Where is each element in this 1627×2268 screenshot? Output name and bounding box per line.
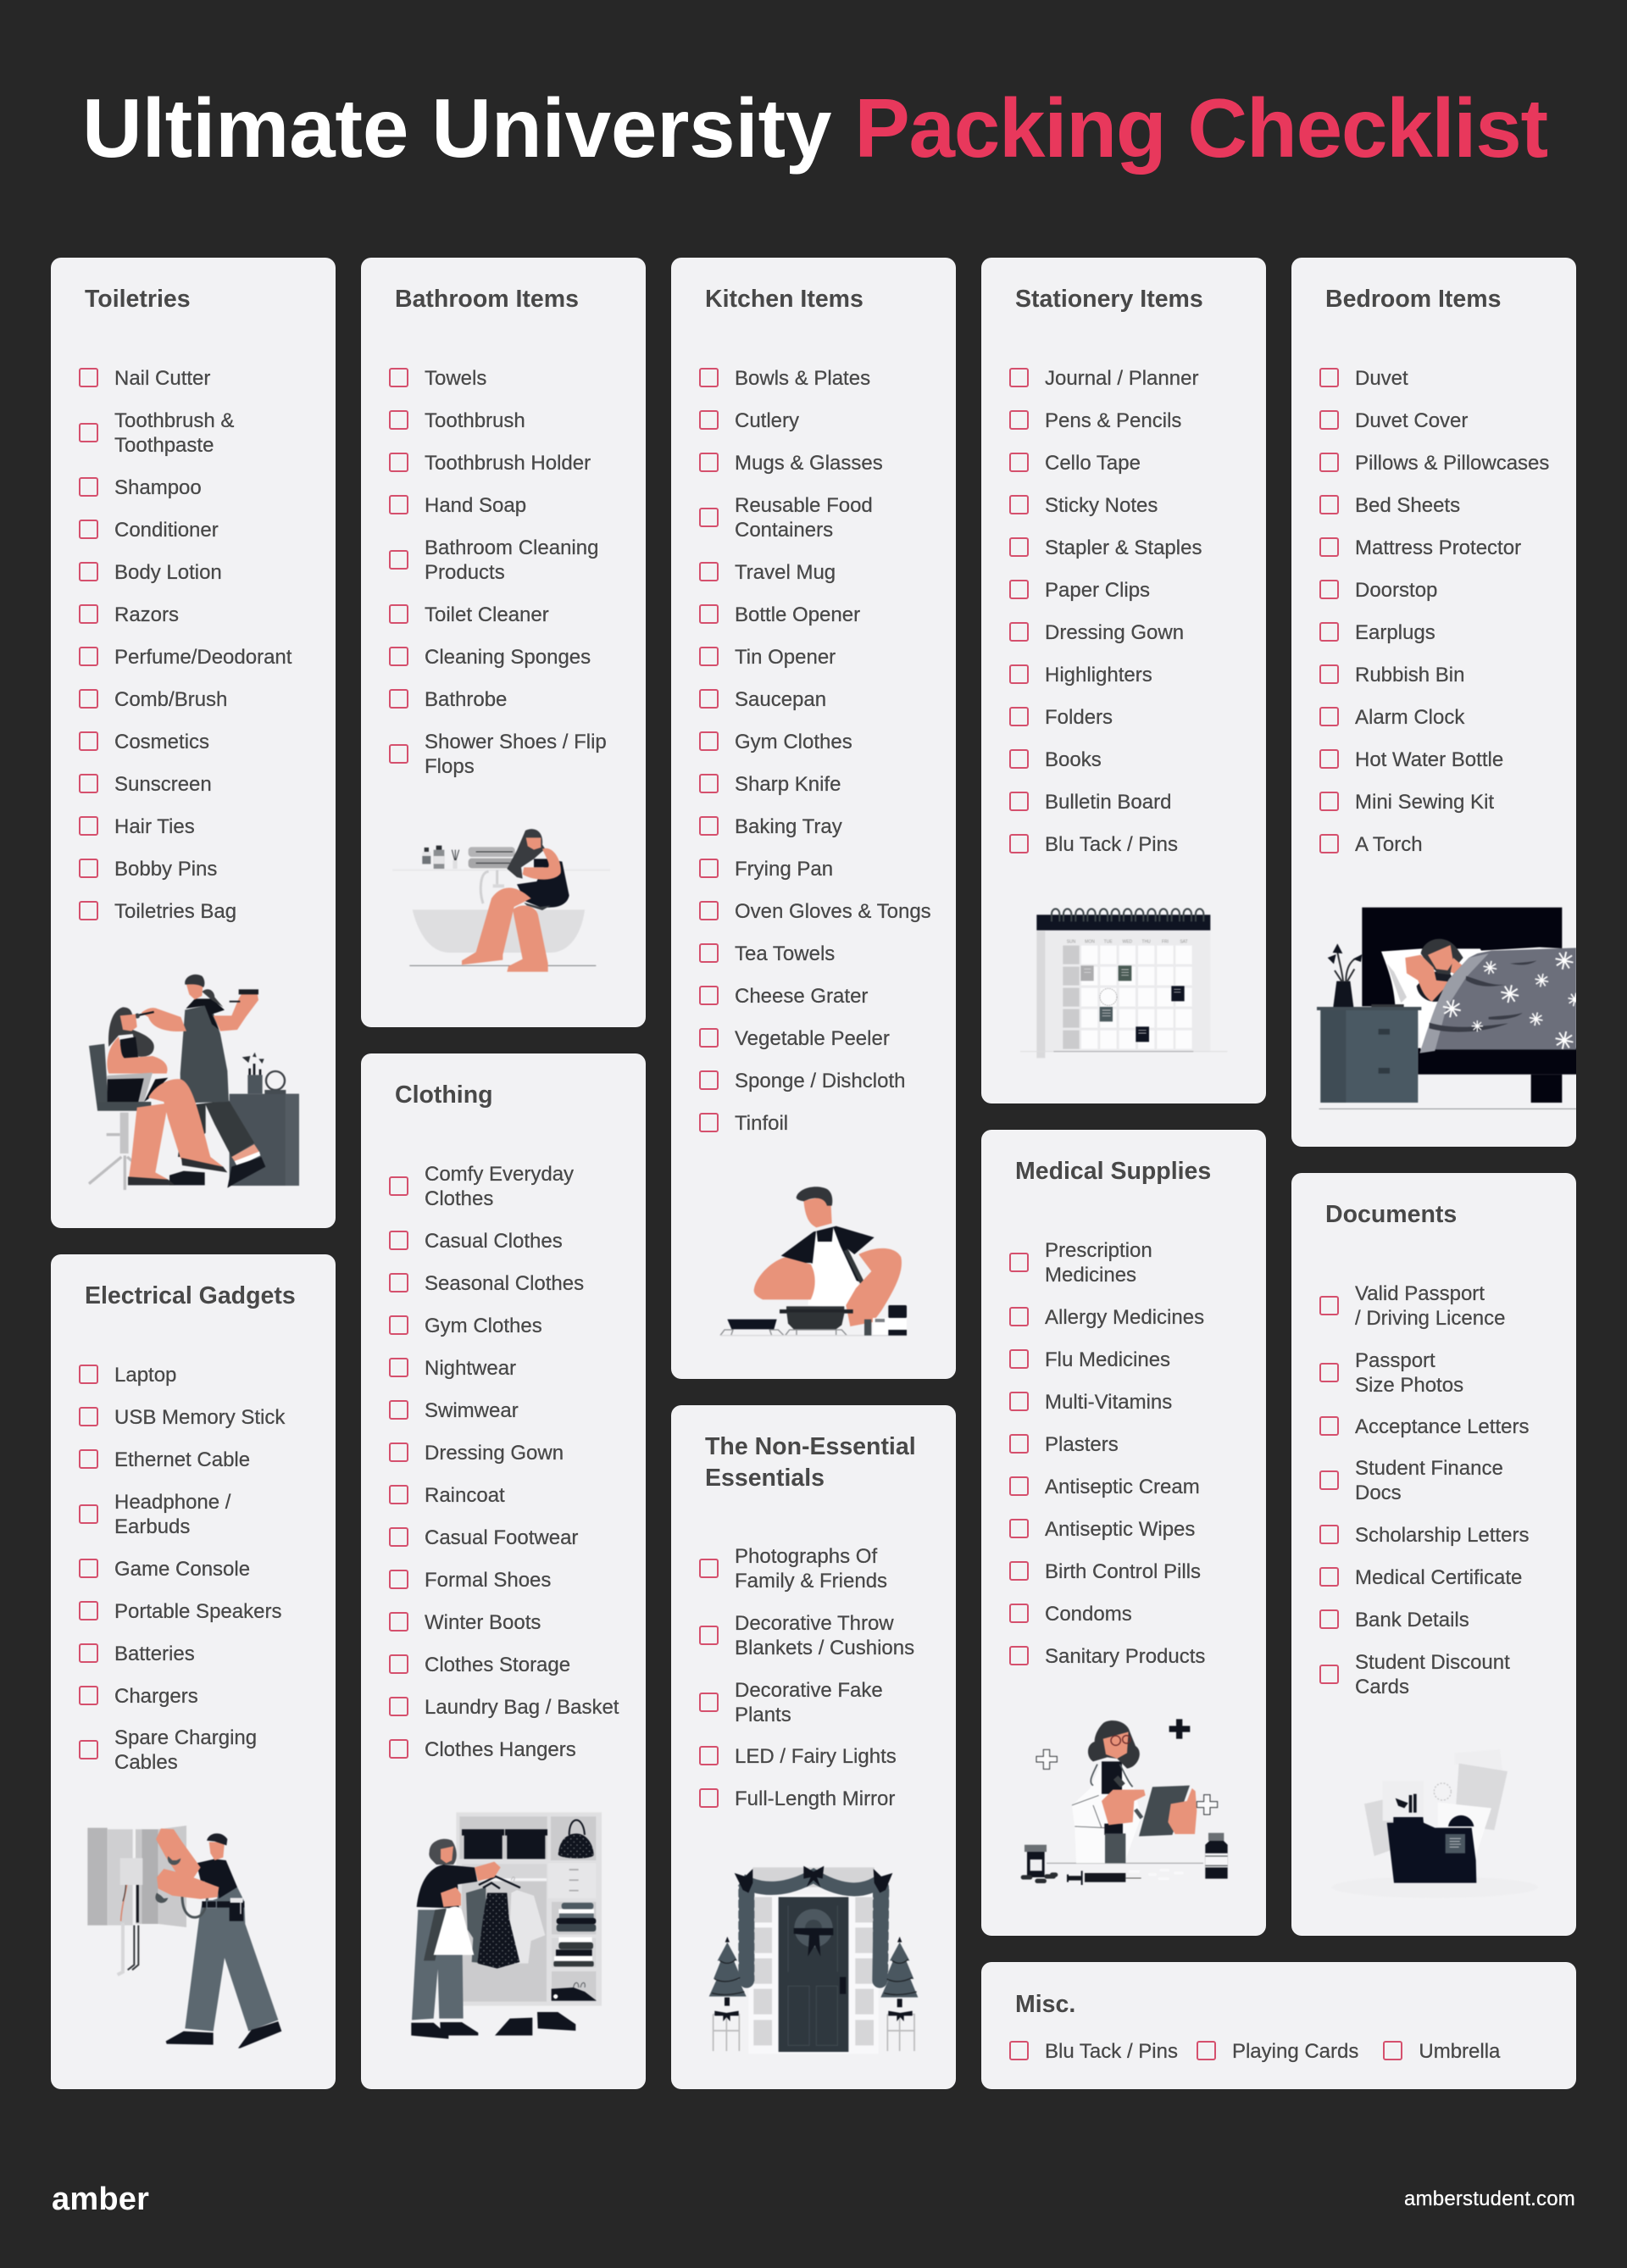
panel: Electrical Gadgets	[51, 1254, 336, 2089]
checklist: Kitchen Items: Sponge / Dishcloth	[735, 1070, 905, 1092]
illustration: wall calendar: WED	[1122, 940, 1133, 945]
checklist: Kitchen Items: Vegetable Peeler	[735, 1027, 890, 1050]
checklist: Bedroom Items: Duvet Cover	[1355, 409, 1468, 432]
checklist: Kitchen Items: Bowls & Plates	[735, 367, 870, 390]
title: Ultimate University Packing Checklist	[82, 81, 1547, 175]
illustration: folder of documents	[1364, 1763, 1508, 1884]
checklist: Toiletries: Toiletries Bag	[114, 900, 236, 923]
checklist: Toiletries	[79, 367, 292, 923]
checklist: Medical Supplies: Flu Medicines	[1045, 1348, 1170, 1371]
checklist: Clothing: Clothes Storage	[425, 1654, 570, 1676]
panel: Stationery Items	[981, 258, 1266, 1103]
checklist: Stationery Items: Blu Tack / Pins	[1045, 833, 1178, 856]
checklist: Medical Supplies	[1009, 1239, 1205, 1668]
checklist: Clothing: Winter Boots	[425, 1611, 541, 1634]
panel: Misc.	[981, 1962, 1576, 2089]
illustration: person sleeping in bed	[1316, 907, 1576, 1110]
checklist: Kitchen Items: Cheese Grater	[735, 985, 868, 1008]
checklist: Documents: / Driving Licence	[1355, 1307, 1505, 1330]
heading: Medical Supplies: Medical Supplies	[1015, 1158, 1211, 1185]
checklist: The Non-Essential Essentials: Decorative Throw	[735, 1612, 894, 1635]
checklist: Electrical Gadgets: Laptop	[114, 1364, 176, 1387]
checklist: Toiletries: Comb/Brush	[114, 688, 227, 711]
heading: Kitchen Items: Kitchen Items	[705, 286, 863, 313]
checklist: Clothing: Comfy Everyday	[425, 1163, 574, 1186]
checklist: Medical Supplies: Plasters	[1045, 1433, 1119, 1456]
heading: Clothing: Clothing	[395, 1081, 493, 1109]
checklist: Kitchen Items: Containers	[735, 519, 833, 542]
checklist: Toiletries: Toothbrush &	[114, 409, 234, 432]
checklist: Stationery Items: Journal / Planner	[1045, 367, 1198, 390]
checklist: Documents: Valid Passport	[1355, 1282, 1485, 1305]
checklist: Bathroom Items: Flops	[425, 755, 475, 778]
checklist: Medical Supplies: Prescription	[1045, 1239, 1152, 1262]
checklist: The Non-Essential Essentials: Decorative Fake	[735, 1679, 883, 1702]
checklist: Toiletries: Shampoo	[114, 476, 202, 499]
checklist: Stationery Items: Pens & Pencils	[1045, 409, 1181, 432]
panel: The Non-Essential Essentials	[671, 1405, 956, 2089]
checklist: The Non-Essential Essentials	[699, 1545, 914, 1810]
checklist: Bedroom Items: Duvet	[1355, 367, 1408, 390]
checklist: Bedroom Items	[1319, 367, 1549, 856]
checklist: Electrical Gadgets: Cables	[114, 1751, 178, 1774]
checklist: Clothing: Gym Clothes	[425, 1315, 542, 1337]
checklist: Kitchen Items: Bottle Opener	[735, 603, 860, 626]
checklist: Clothing: Swimwear	[425, 1399, 519, 1422]
checklist: Clothing: Casual Clothes	[425, 1230, 563, 1253]
heading: Bedroom Items: Bedroom Items	[1325, 286, 1501, 313]
checklist: Toiletries: Sunscreen	[114, 773, 212, 796]
checklist: Clothing	[389, 1163, 619, 1761]
checklist: Medical Supplies: Antiseptic Wipes	[1045, 1518, 1195, 1541]
illustration: wall calendar	[1020, 907, 1227, 1058]
checklist: Documents: Passport	[1355, 1349, 1435, 1372]
checklist: Electrical Gadgets: Game Console	[114, 1558, 250, 1581]
checklist: The Non-Essential Essentials: Photographs Of	[735, 1545, 877, 1568]
illustration: electrician at fuse box	[86, 1826, 282, 2049]
checklist: Toiletries: Cosmetics	[114, 731, 209, 753]
checklist: Stationery Items: Dressing Gown	[1045, 621, 1184, 644]
heading: Documents: Documents	[1325, 1201, 1457, 1228]
illustration: wall calendar: TUE	[1104, 940, 1113, 945]
checklist: Kitchen Items: Tea Towels	[735, 942, 835, 965]
panel: Bathroom Items	[361, 258, 646, 1027]
illustration: wall calendar: SUN	[1067, 940, 1076, 945]
checklist: Kitchen Items: Reusable Food	[735, 494, 873, 517]
checklist: Bathroom Items: Bathrobe	[425, 688, 507, 711]
checklist: Kitchen Items: Gym Clothes	[735, 731, 852, 753]
checklist: Clothing: Casual Footwear	[425, 1526, 578, 1549]
logo: amber: amber	[52, 2182, 149, 2217]
checklist: The Non-Essential Essentials: Plants	[735, 1704, 791, 1726]
checklist: Stationery Items: Cello Tape	[1045, 452, 1141, 475]
checklist: Kitchen Items: Tin Opener	[735, 646, 836, 669]
checklist: Electrical Gadgets: Spare Charging	[114, 1726, 257, 1749]
checklist: Kitchen Items: Tinfoil	[735, 1112, 788, 1135]
checklist: Documents: Bank Details	[1355, 1609, 1469, 1632]
checklist: Medical Supplies: Sanitary Products	[1045, 1645, 1205, 1668]
heading: Electrical Gadgets: Electrical Gadgets	[85, 1282, 296, 1309]
checklist: Misc.: Blu Tack / Pins	[1045, 2040, 1178, 2063]
checklist: Bathroom Items: Shower Shoes / Flip	[425, 731, 607, 753]
checklist: Toiletries: Bobby Pins	[114, 858, 217, 881]
checklist: Electrical Gadgets: Batteries	[114, 1643, 195, 1665]
checklist: Kitchen Items: Oven Gloves & Tongs	[735, 900, 931, 923]
illustration: wall calendar: MON	[1085, 940, 1095, 945]
checklist: Bathroom Items: Cleaning Sponges	[425, 646, 591, 669]
checklist: Documents: Docs	[1355, 1481, 1402, 1504]
illustration: decorated front door	[708, 1865, 919, 2053]
checklist: Documents: Scholarship Letters	[1355, 1524, 1529, 1547]
checklist: Bathroom Items: Hand Soap	[425, 494, 526, 517]
checklist: Stationery Items	[1009, 367, 1202, 856]
checklist: Bedroom Items: Bed Sheets	[1355, 494, 1460, 517]
checklist: Stationery Items: Stapler & Staples	[1045, 536, 1202, 559]
checklist: Bedroom Items: Mattress Protector	[1355, 536, 1521, 559]
checklist: Documents	[1319, 1282, 1529, 1698]
checklist: Bedroom Items: Rubbish Bin	[1355, 664, 1464, 687]
panel: Toiletries	[51, 258, 336, 1228]
checklist: Bathroom Items	[389, 367, 607, 778]
illustration: wall calendar: FRI	[1162, 940, 1169, 945]
checklist: Bedroom Items: Hot Water Bottle	[1355, 748, 1503, 771]
checklist: Electrical Gadgets	[79, 1364, 286, 1774]
checklist: Bedroom Items: Earplugs	[1355, 621, 1435, 644]
checklist: Stationery Items: Books	[1045, 748, 1102, 771]
checklist: Toiletries: Hair Ties	[114, 815, 195, 838]
checklist: Clothing: Dressing Gown	[425, 1442, 564, 1465]
checklist: Clothing: Clothes Hangers	[425, 1738, 576, 1761]
checklist: Clothing: Laundry Bag / Basket	[425, 1696, 619, 1719]
checklist: Clothing: Raincoat	[425, 1484, 505, 1507]
checklist: Documents: Acceptance Letters	[1355, 1415, 1529, 1438]
illustration: woman choosing clothes at wardrobe	[410, 1812, 602, 2039]
illustration: makeup artist and client	[88, 974, 300, 1190]
checklist: Electrical Gadgets: USB Memory Stick	[114, 1406, 285, 1429]
heading: The Non-Essential Essentials	[705, 1433, 916, 1492]
panel: Bedroom Items	[1291, 258, 1576, 1147]
illustration: doctor with notepad and medicine	[1020, 1719, 1229, 1886]
illustration: man cooking	[719, 1186, 908, 1337]
checklist: Bedroom Items: Alarm Clock	[1355, 706, 1464, 729]
checklist: Kitchen Items: Sharp Knife	[735, 773, 841, 796]
checklist: The Non-Essential Essentials: Blankets / Cushions	[735, 1637, 914, 1659]
checklist: Electrical Gadgets: Earbuds	[114, 1515, 190, 1538]
checklist: Electrical Gadgets: Chargers	[114, 1685, 198, 1708]
checklist: Misc.: Playing Cards	[1232, 2040, 1358, 2063]
checklist: Toiletries: Toothpaste	[114, 434, 214, 457]
heading: Misc.: Misc.	[1015, 1991, 1075, 2018]
checklist: Toiletries: Razors	[114, 603, 179, 626]
heading: The Non-Essential Essentials: The Non-Essential	[705, 1433, 916, 1460]
checklist: Bathroom Items: Toilet Cleaner	[425, 603, 549, 626]
checklist: Kitchen Items: Mugs & Glasses	[735, 452, 883, 475]
checklist: The Non-Essential Essentials: Full-Length Mirror	[735, 1787, 895, 1810]
heading: The Non-Essential Essentials: Essentials	[705, 1465, 825, 1492]
checklist: Stationery Items: Folders	[1045, 706, 1113, 729]
checklist: Bathroom Items: Bathroom Cleaning	[425, 536, 598, 559]
checklist: Stationery Items: Highlighters	[1045, 664, 1152, 687]
checklist: The Non-Essential Essentials: LED / Fairy Lights	[735, 1745, 897, 1768]
panel: Documents	[1291, 1173, 1576, 1936]
checklist: Documents: Medical Certificate	[1355, 1566, 1522, 1589]
checklist: Kitchen Items	[699, 367, 931, 1135]
checklist: Bedroom Items: Doorstop	[1355, 579, 1437, 602]
checklist: Documents: Student Discount	[1355, 1651, 1510, 1674]
panel: Medical Supplies	[981, 1130, 1266, 1936]
checklist: Medical Supplies: Birth Control Pills	[1045, 1560, 1201, 1583]
checklist: Toiletries: Conditioner	[114, 519, 219, 542]
checklist: Kitchen Items: Saucepan	[735, 688, 826, 711]
checklist: Medical Supplies: Medicines	[1045, 1264, 1136, 1287]
checklist: Medical Supplies: Antiseptic Cream	[1045, 1476, 1200, 1498]
heading: Stationery Items: Stationery Items	[1015, 286, 1203, 313]
illustration: woman on bathtub edge	[393, 828, 609, 973]
checklist: Toiletries: Perfume/Deodorant	[114, 646, 292, 669]
checklist: Kitchen Items: Baking Tray	[735, 815, 842, 838]
checklist: Kitchen Items: Travel Mug	[735, 561, 836, 584]
checklist: Bedroom Items: A Torch	[1355, 833, 1423, 856]
checklist: Stationery Items: Paper Clips	[1045, 579, 1150, 602]
checklist: Bathroom Items: Products	[425, 561, 505, 584]
checklist: Bathroom Items: Toothbrush Holder	[425, 452, 591, 475]
checklist: Bathroom Items: Toothbrush	[425, 409, 525, 432]
checklist: Medical Supplies: Allergy Medicines	[1045, 1306, 1204, 1329]
panel: Clothing	[361, 1053, 646, 2089]
illustration: wall calendar: SAT	[1180, 940, 1188, 945]
checklist: Misc.	[1009, 2040, 1500, 2063]
checklist: Clothing: Clothes	[425, 1187, 493, 1210]
checklist: Clothing: Seasonal Clothes	[425, 1272, 584, 1295]
checklist: Medical Supplies: Multi-Vitamins	[1045, 1391, 1172, 1414]
panel: Kitchen Items	[671, 258, 956, 1379]
checklist: Documents: Cards	[1355, 1676, 1409, 1698]
checklist: Misc.: Umbrella	[1419, 2040, 1500, 2063]
checklist: Documents: Size Photos	[1355, 1374, 1463, 1397]
footer url: amberstudent.com	[1404, 2187, 1575, 2210]
heading: Bathroom Items: Bathroom Items	[395, 286, 579, 313]
checklist: Electrical Gadgets: Headphone /	[114, 1491, 230, 1514]
checklist: Bathroom Items: Towels	[425, 367, 486, 390]
checklist: Bedroom Items: Pillows & Pillowcases	[1355, 452, 1549, 475]
checklist: Kitchen Items: Frying Pan	[735, 858, 833, 881]
checklist: Electrical Gadgets: Ethernet Cable	[114, 1448, 250, 1471]
checklist: Bedroom Items: Mini Sewing Kit	[1355, 791, 1494, 814]
checklist: Kitchen Items: Cutlery	[735, 409, 799, 432]
checklist: Stationery Items: Sticky Notes	[1045, 494, 1158, 517]
heading: Toiletries: Toiletries	[85, 286, 191, 313]
checklist: Documents: Student Finance	[1355, 1457, 1503, 1480]
checklist: Toiletries: Body Lotion	[114, 561, 222, 584]
illustration: wall calendar: THU	[1142, 940, 1151, 945]
checklist: Stationery Items: Bulletin Board	[1045, 791, 1171, 814]
checklist: The Non-Essential Essentials: Family & Friends	[735, 1570, 887, 1593]
checklist: Clothing: Formal Shoes	[425, 1569, 551, 1592]
checklist: Toiletries: Nail Cutter	[114, 367, 210, 390]
checklist: Electrical Gadgets: Portable Speakers	[114, 1600, 281, 1623]
checklist: Clothing: Nightwear	[425, 1357, 516, 1380]
checklist: Medical Supplies: Condoms	[1045, 1603, 1132, 1626]
